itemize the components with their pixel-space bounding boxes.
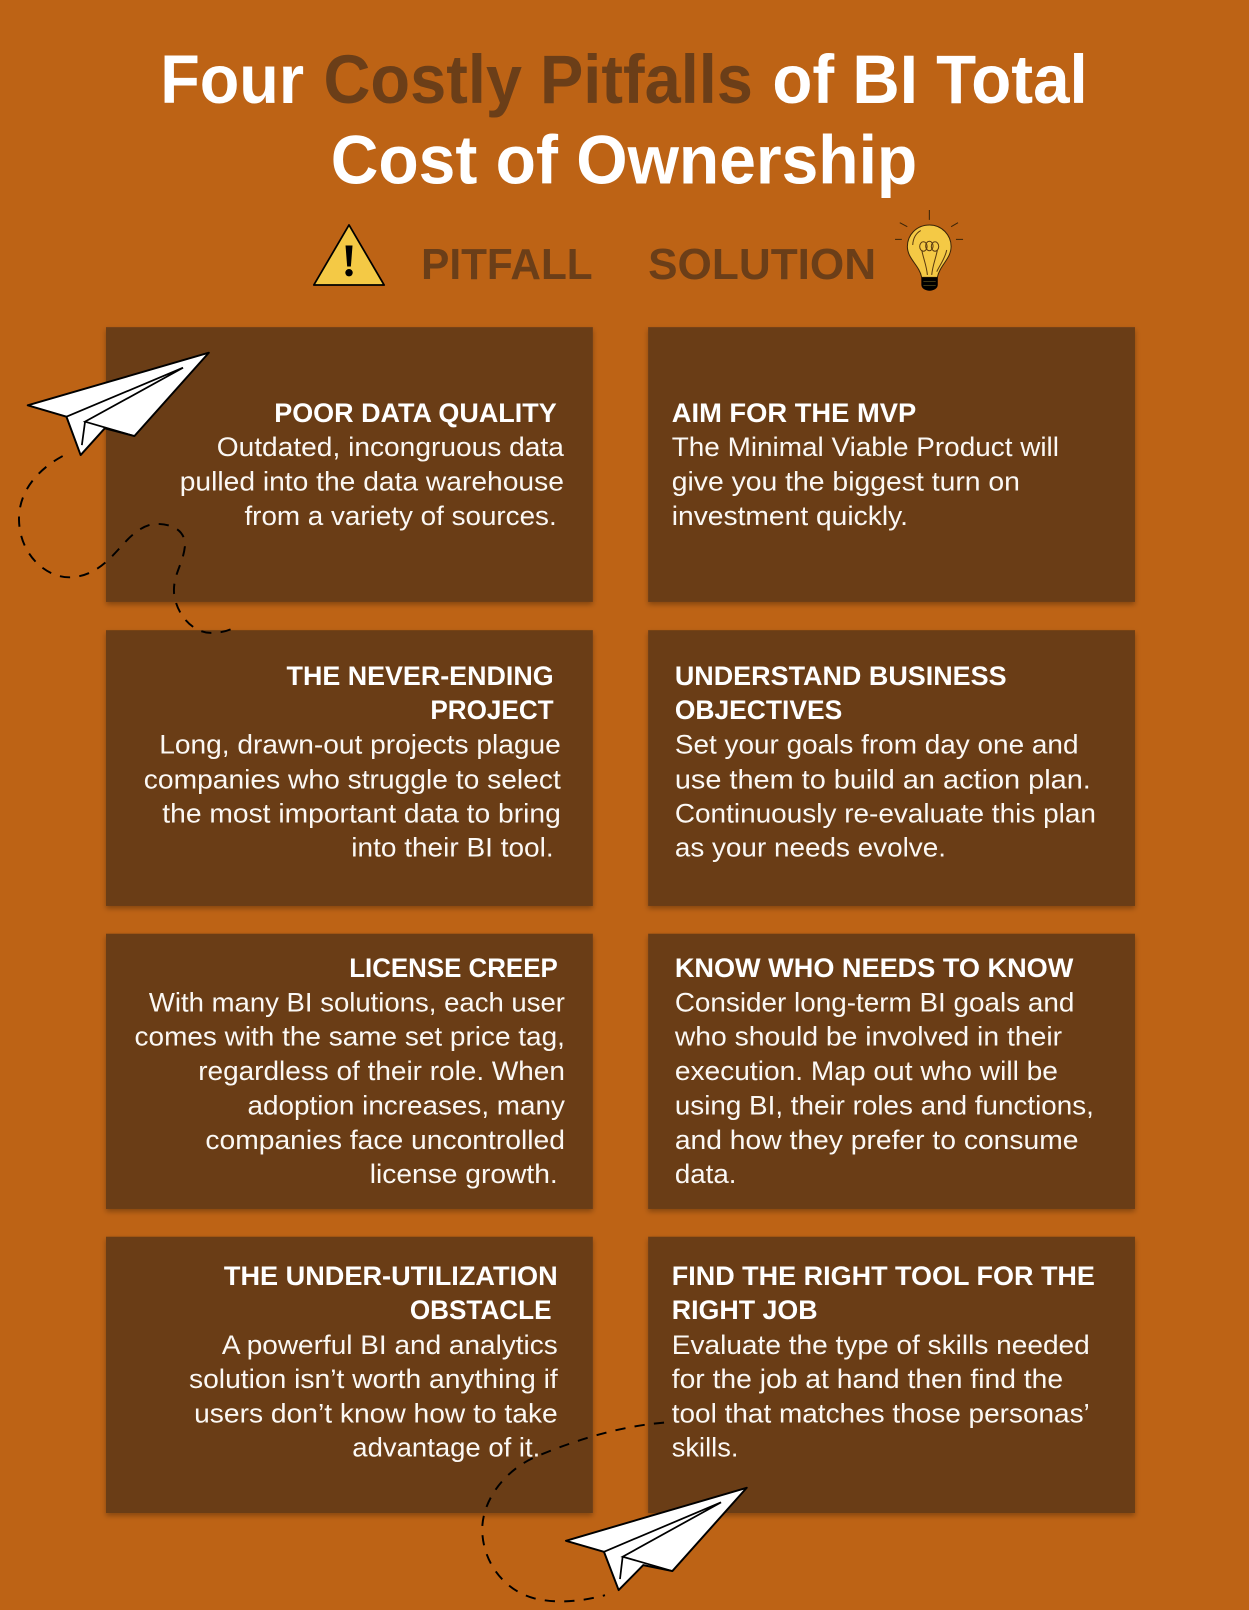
title: Costly Pitfalls <box>324 41 753 118</box>
text: license creep: adoption increases, many <box>248 1089 565 1120</box>
text: the never-ending project <box>144 728 561 863</box>
heading: find the right tool <box>672 1260 1095 1325</box>
heading: poor data quality: POOR DATA QUALITY <box>274 397 557 428</box>
text: aim for the mvp: give you the biggest turn on <box>672 465 1020 496</box>
text: the under-utilization obstacle: advantage of it. <box>352 1432 540 1463</box>
panel: license creep <box>106 934 593 1209</box>
text: understand business objectives <box>675 728 1096 863</box>
text: aim for the mvp <box>672 431 1059 531</box>
text: the under-utilization obstacle: solution isn’t worth anything if <box>189 1363 558 1394</box>
panel: aim for the mvp <box>648 327 1135 602</box>
text: license creep: license growth. <box>370 1158 558 1189</box>
heading: solution: SOLUTION <box>648 241 876 289</box>
text: poor data quality: Outdated, incongruous data <box>217 431 565 462</box>
text: aim for the mvp: investment quickly. <box>672 500 908 531</box>
text: know who needs to know: using BI, their roles and functions, <box>675 1089 1094 1120</box>
text: the never-ending project: companies who struggle to select <box>144 763 561 794</box>
text: license creep: companies face uncontrolled <box>205 1124 565 1155</box>
heading: aim for the mvp: AIM FOR THE MVP <box>672 397 916 428</box>
panel: know who needs to know <box>648 934 1135 1209</box>
heading: license creep: LICENSE CREEP <box>349 952 558 983</box>
text: poor data quality: from a variety of sources. <box>244 500 557 531</box>
text: know who needs to know: who should be involved in their <box>674 1021 1062 1052</box>
text: poor data quality <box>180 431 565 531</box>
text: aim for the mvp: The Minimal Viable Product will <box>672 431 1059 462</box>
text: license creep: comes with the same set price tag, <box>135 1021 565 1052</box>
text: find the right tool: tool that matches those personas’ <box>672 1398 1090 1429</box>
text: the never-ending project: into their BI tool. <box>351 832 554 863</box>
title: Cost of Ownership <box>331 121 917 198</box>
text: know who needs to know: Consider long-term BI goals and <box>675 986 1074 1017</box>
panel: poor data quality <box>106 327 593 602</box>
heading: the never-ending project: THE NEVER-ENDING <box>287 660 554 691</box>
panel: understand business objectives <box>648 630 1135 906</box>
text: understand business objectives: use them to build an action plan. <box>675 763 1091 794</box>
heading: the under-utilization obstacle <box>224 1260 558 1325</box>
icon: dashed flight trail bottom <box>482 1423 664 1601</box>
text: know who needs to know: data. <box>675 1158 736 1189</box>
icon: warning triangle <box>314 225 384 285</box>
icon: paper plane top <box>28 353 209 455</box>
heading: know who needs to know: KNOW WHO NEEDS TO KNOW <box>675 952 1074 983</box>
heading: the never-ending project <box>287 660 554 725</box>
text: license creep: With many BI solutions, each user <box>149 986 565 1017</box>
heading: understand business objectives: OBJECTIVES <box>675 694 842 725</box>
text: the never-ending project: the most important data to bring <box>162 797 561 828</box>
text: understand business objectives: Continuously re-evaluate this plan <box>675 797 1096 828</box>
title: Four <box>160 41 304 118</box>
heading: the under-utilization obstacle: OBSTACLE <box>410 1294 552 1325</box>
text: the under-utilization obstacle <box>189 1329 558 1463</box>
title <box>160 41 1088 198</box>
heading: find the right tool: FIND THE RIGHT TOOL FOR THE <box>672 1260 1095 1291</box>
text: poor data quality: pulled into the data warehouse <box>180 465 564 496</box>
heading: the under-utilization obstacle: THE UNDER-UTILIZATION <box>224 1260 558 1291</box>
text: find the right tool <box>672 1329 1090 1463</box>
icon: paper plane bottom <box>566 1488 747 1590</box>
text: license creep <box>135 986 565 1189</box>
heading: the never-ending project: PROJECT <box>430 694 554 725</box>
text: know who needs to know: execution. Map out who will be <box>675 1055 1058 1086</box>
text: understand business objectives: as your needs evolve. <box>675 832 946 863</box>
text: find the right tool: Evaluate the type of skills needed <box>672 1329 1090 1360</box>
icon: dashed flight trail top <box>19 456 232 633</box>
text: know who needs to know: and how they prefer to consume <box>675 1124 1078 1155</box>
text: the never-ending project: Long, drawn-out projects plague <box>159 728 561 759</box>
title: of BI Total <box>772 41 1088 118</box>
text: license creep: regardless of their role. When <box>198 1055 565 1086</box>
text: find the right tool: for the job at hand then find the <box>672 1363 1063 1394</box>
text: the under-utilization obstacle: users don’t know how to take <box>194 1398 558 1429</box>
icon: light bulb <box>895 210 963 291</box>
text: understand business objectives: Set your goals from day one and <box>675 728 1078 759</box>
text: find the right tool: skills. <box>672 1432 739 1463</box>
heading: understand business objectives: UNDERSTAND BUSINESS <box>675 660 1007 691</box>
heading: understand business objectives <box>675 660 1007 725</box>
panel: the under-utilization obstacle <box>106 1237 593 1513</box>
panel: find the right tool for the right job <box>648 1237 1135 1513</box>
heading: pitfall: PITFALL <box>421 241 593 289</box>
text: know who needs to know <box>674 986 1094 1189</box>
heading: find the right tool: RIGHT JOB <box>672 1294 818 1325</box>
text: the under-utilization obstacle: A powerful BI and analytics <box>222 1329 558 1360</box>
panel: the never-ending project <box>106 630 593 906</box>
